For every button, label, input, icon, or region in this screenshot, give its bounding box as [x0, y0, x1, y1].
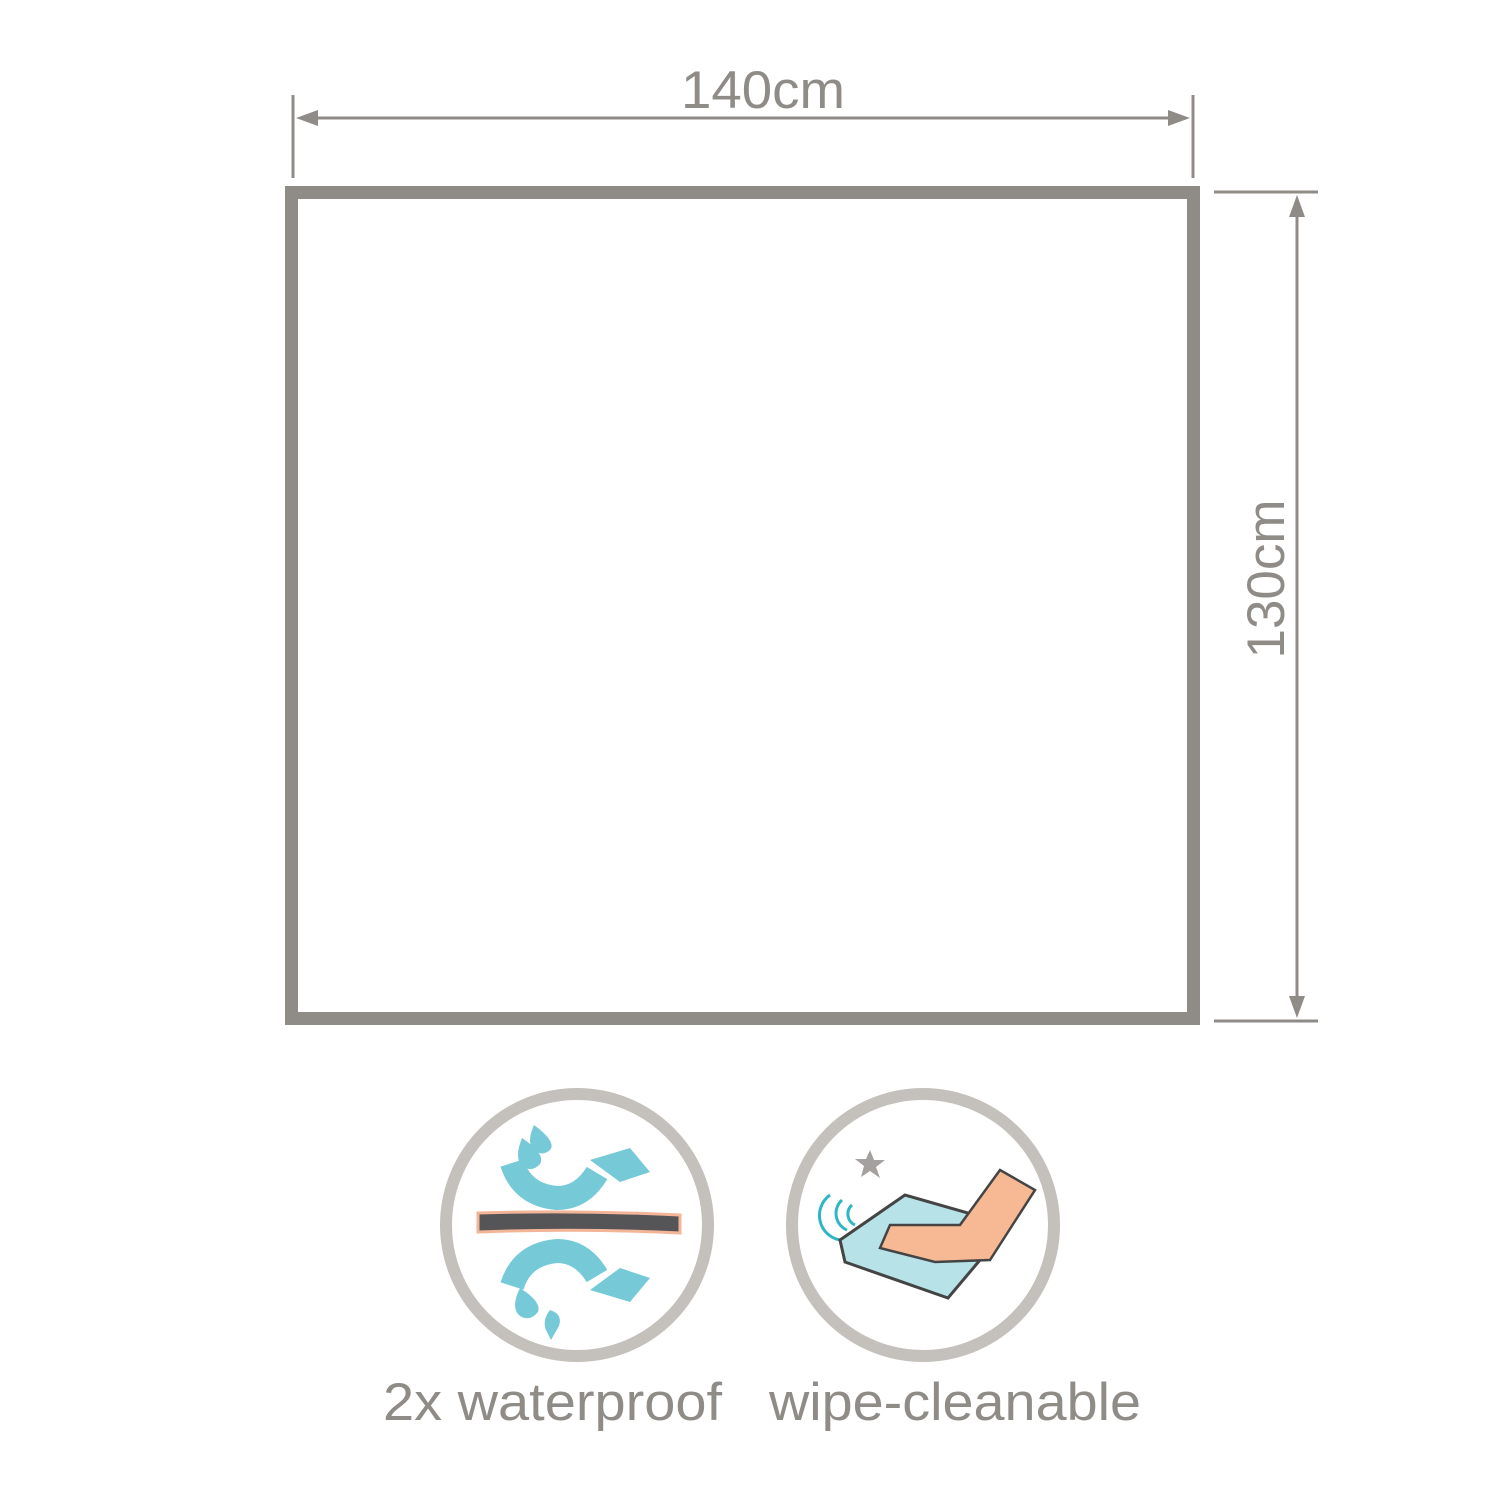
label: 2x waterproof: 2x waterproof	[383, 1373, 722, 1432]
height dimension: 130cm	[1237, 499, 1296, 659]
width dimension	[293, 61, 1193, 178]
width dimension: 140cm	[681, 61, 845, 120]
label: wipe-cleanable: wipe-cleanable	[768, 1373, 1141, 1432]
product outline	[292, 192, 1194, 1018]
height dimension	[1214, 192, 1318, 1021]
icon: waterproof	[446, 1094, 708, 1356]
icon: wipe-cleanable	[792, 1094, 1054, 1356]
